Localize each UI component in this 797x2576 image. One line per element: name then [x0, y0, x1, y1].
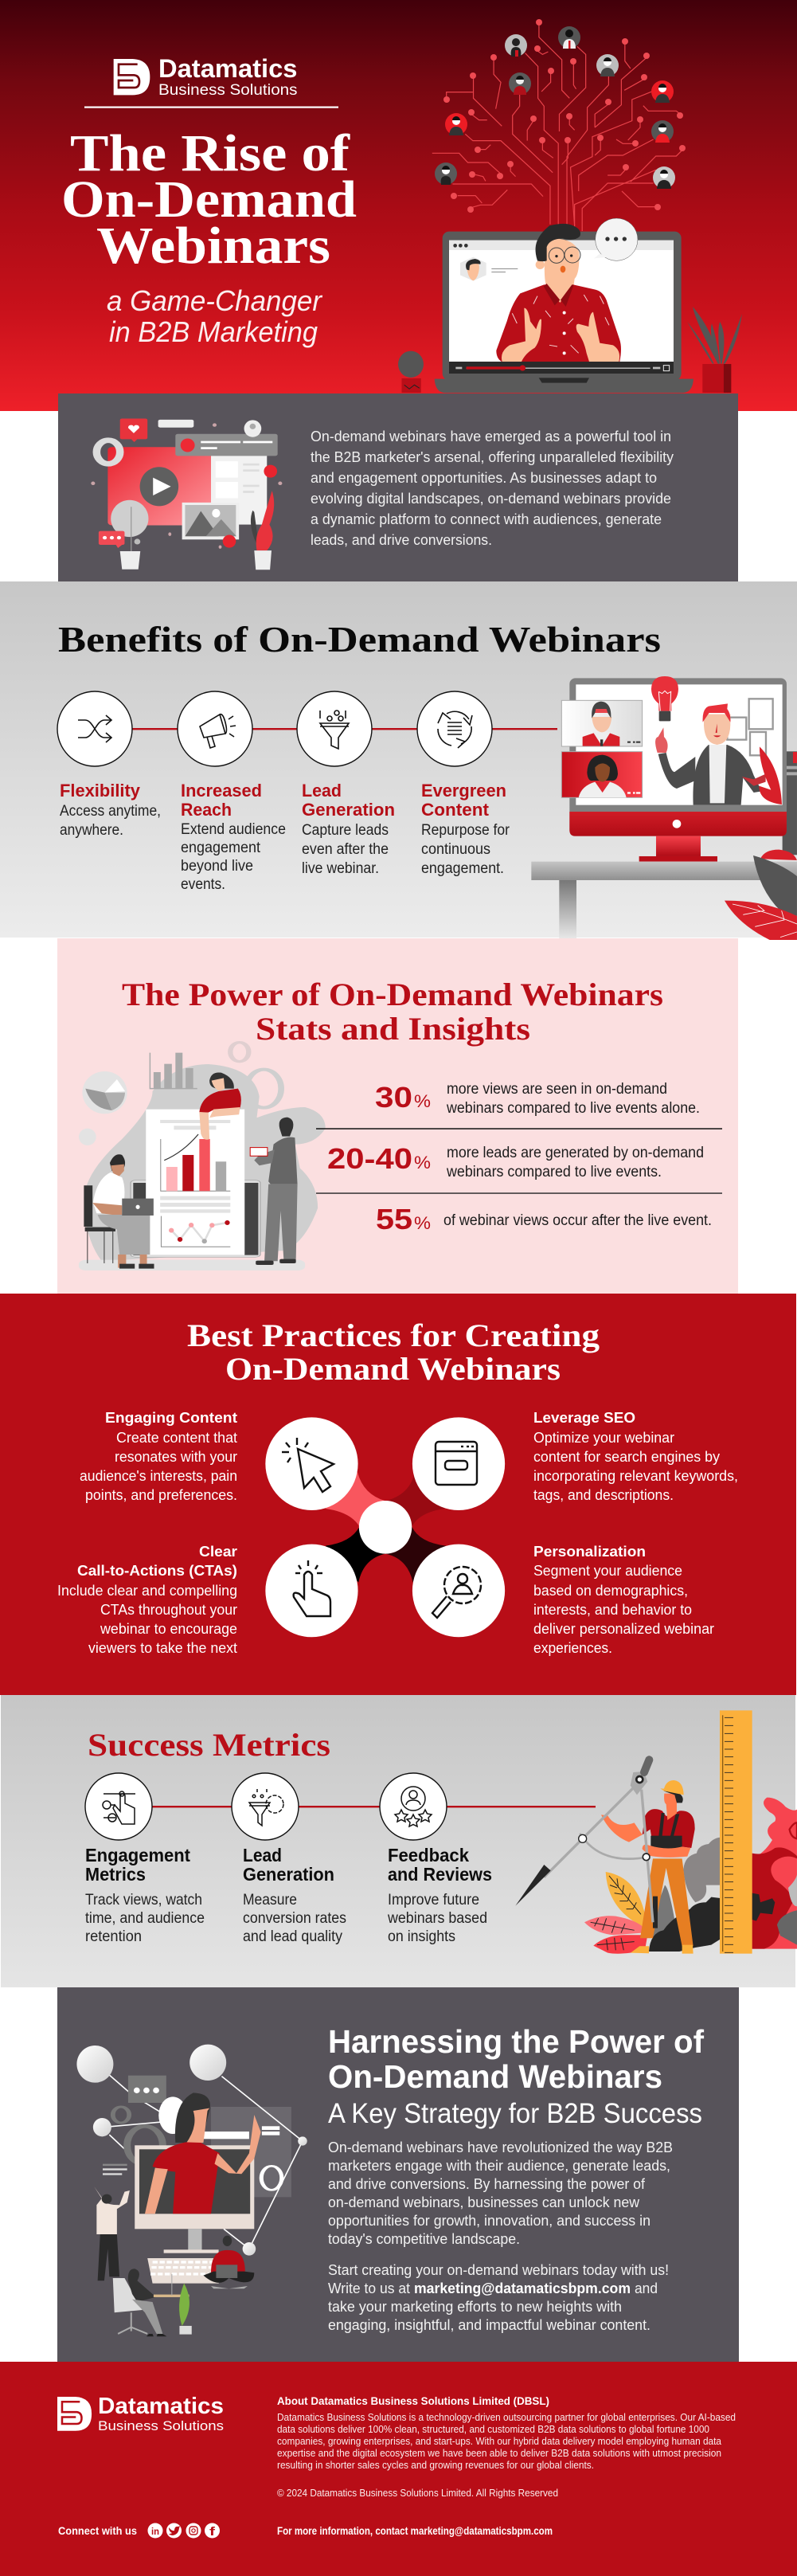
text: harnessing body: take your marketing efforts to new heights with	[328, 2298, 622, 2315]
intro text: On-demand webinars have emerged as a powerful tool in	[311, 429, 671, 444]
illustration: monitor with video call on desk	[531, 676, 797, 940]
stat: 55 percent: 55	[376, 1203, 412, 1235]
text: clear CTAs	[57, 1544, 237, 1656]
illustration: worker with compass and ruler	[515, 1710, 797, 1954]
metric: feedback and reviews: Feedback	[388, 1845, 469, 1865]
text: leverage SEO: Optimize your webinar	[533, 1430, 674, 1446]
text: engaging content: Engaging Content	[105, 1410, 237, 1426]
text: about DBSL: Datamatics Business Solutions is a technology-driven outsourcing partner for global enterprises. Our AI-based	[277, 2412, 736, 2423]
panel: harnessing the power	[57, 1987, 739, 2362]
text: harnessing body: marketers engage with their audience, generate leads,	[328, 2157, 670, 2174]
metric: lead generation: Lead	[243, 1845, 282, 1865]
text: harnessing body: and	[635, 2280, 658, 2296]
text: clear CTAs: Include clear and compelling	[57, 1583, 237, 1599]
heading: harnessing: On-Demand Webinars	[328, 2058, 662, 2095]
benefit: evergreen content: engagement.	[421, 860, 504, 877]
metric: engagement metrics: Engagement	[85, 1845, 190, 1865]
stat: 30 percent: webinars compared to live events alone.	[446, 1100, 700, 1117]
intro text: the B2B marketer's arsenal, offering unparalleled flexibility	[311, 449, 674, 465]
icon: pointing finger tap	[294, 1560, 330, 1616]
benefit: increased reach: Increased	[181, 781, 262, 801]
text: engaging content	[80, 1410, 237, 1503]
text: personalization	[533, 1544, 714, 1656]
metric: engagement metrics: retention	[85, 1928, 142, 1945]
heading: harnessing: A Key Strategy for B2B Success	[328, 2098, 702, 2129]
text: harnessing body: marketing@datamaticsbpm.com	[414, 2280, 631, 2296]
text: about DBSL: About Datamatics Business Solutions Limited (DBSL)	[277, 2395, 549, 2407]
intro text	[311, 429, 674, 548]
icon: cursor click	[282, 1438, 334, 1492]
text: leverage SEO: incorporating relevant keywords,	[533, 1468, 738, 1484]
benefit: lead generation	[297, 691, 395, 877]
metric: engagement metrics	[85, 1773, 205, 1945]
text: harnessing body: engaging, insightful, and impactful webinar content.	[328, 2316, 650, 2333]
metric: engagement metrics: time, and audience	[85, 1910, 205, 1927]
stat: 20-40 percent: webinars compared to live events.	[446, 1164, 662, 1180]
title: Webinars	[96, 217, 330, 275]
text: harnessing body: Start creating your on-demand webinars today with us!	[328, 2261, 669, 2278]
text: clear CTAs: webinar to encourage	[100, 1621, 237, 1637]
heading: best practices: Best Practices for Creating	[187, 1317, 600, 1353]
panel: footer	[0, 2362, 797, 2576]
logo: Datamatics footer: Datamatics	[98, 2394, 224, 2419]
benefit: flexibility: Flexibility	[60, 781, 141, 801]
stat: 20-40 percent: 20-40	[327, 1142, 412, 1175]
heading: benefits: Benefits of On-Demand Webinars	[58, 619, 661, 660]
stat: 30 percent: 30	[375, 1081, 412, 1114]
text: leverage SEO: tags, and descriptions.	[533, 1487, 674, 1503]
benefit: evergreen content: Evergreen	[421, 781, 506, 801]
text: about DBSL	[277, 2395, 736, 2499]
metric: engagement metrics: Track views, watch	[85, 1892, 202, 1909]
stat: 20-40 percent: %	[414, 1153, 431, 1173]
logo: Datamatics footer	[57, 2394, 224, 2433]
stat: 20-40 percent	[327, 1142, 704, 1180]
benefit: evergreen content	[417, 691, 510, 877]
benefit: lead generation: even after the	[302, 841, 389, 858]
text: contact line: For more information, contact marketing@datamaticsbpm.com	[277, 2524, 553, 2537]
text: leverage SEO	[533, 1410, 738, 1503]
metric: lead generation: conversion rates	[243, 1910, 346, 1927]
intro text: leads, and drive conversions.	[311, 532, 492, 548]
text: engaging content: Create content that	[116, 1430, 237, 1446]
text: harnessing body: opportunities for growth, innovation, and success in	[328, 2212, 650, 2229]
text: personalization: deliver personalized webinar	[533, 1621, 714, 1637]
title: The Rise of	[70, 124, 350, 182]
subtitle	[107, 284, 323, 348]
benefit: increased reach	[178, 691, 286, 893]
text: personalization: Segment your audience	[533, 1563, 682, 1579]
text: about DBSL: resulting in shorter sales cycles and growing revenues for our global clients.	[277, 2460, 594, 2471]
benefit: increased reach: Extend audience	[181, 821, 286, 838]
text: harnessing body: Write to us at	[328, 2280, 410, 2296]
illustration: cactus	[398, 351, 424, 393]
illustration: webinar host in monitor	[76, 2045, 307, 2336]
heading: best practices	[187, 1317, 600, 1387]
metric: feedback and reviews: and Reviews	[388, 1864, 492, 1885]
benefit: lead generation: Lead	[302, 781, 342, 801]
metric: lead generation: and lead quality	[243, 1928, 342, 1945]
stat: 30 percent: %	[414, 1091, 431, 1111]
panel: success metrics	[1, 1695, 797, 1987]
panel: benefits	[0, 581, 797, 940]
metric: feedback and reviews: on insights	[388, 1928, 455, 1945]
benefit: flexibility	[57, 691, 161, 839]
text: harnessing body: and drive conversions. By harnessing the power of	[328, 2175, 646, 2192]
heading: best practices: On-Demand Webinars	[225, 1351, 561, 1387]
metric: lead generation	[232, 1773, 346, 1945]
subtitle: a Game-Changer	[107, 284, 323, 317]
intro text: a dynamic platform to connect with audiences, generate	[311, 511, 662, 527]
title: On-Demand	[61, 170, 357, 229]
text: leverage SEO: content for search engines by	[533, 1449, 720, 1465]
text: harnessing body	[328, 2139, 673, 2333]
text: about DBSL: expertise and the digital ecosystem we have been able to deliver B2B data solutions with utmost precision	[277, 2448, 721, 2459]
social links	[58, 2523, 220, 2539]
panel: stats and insights	[57, 938, 738, 1294]
stat: 55 percent	[376, 1203, 712, 1235]
benefit: lead generation: Capture leads	[302, 822, 389, 839]
benefit: increased reach: events.	[181, 876, 225, 893]
illustration: desk plant	[687, 307, 742, 393]
panel: introduction	[58, 393, 738, 581]
text: about DBSL: © 2024 Datamatics Business Solutions Limited. All Rights Reserved	[277, 2488, 558, 2499]
metric: lead generation: Generation	[243, 1864, 334, 1885]
logo: Datamatics	[84, 54, 338, 108]
people avatars	[435, 26, 675, 189]
text: about DBSL: companies, growing enterprises, and start-ups. With our hybrid data delivery model employing human data	[277, 2436, 721, 2447]
panel: hero header	[0, 0, 797, 411]
social links: Connect with us	[58, 2524, 137, 2537]
social links: f	[209, 2525, 216, 2539]
intro text: evolving digital landscapes, on-demand webinars provide	[311, 491, 671, 507]
benefit: lead generation: Generation	[302, 800, 395, 820]
text: clear CTAs: Clear	[199, 1544, 237, 1560]
logo: Datamatics: Datamatics	[158, 54, 298, 83]
benefit: flexibility: Access anytime,	[60, 803, 161, 820]
text: personalization: interests, and behavior to	[533, 1602, 692, 1618]
benefit: evergreen content: Content	[421, 800, 490, 820]
text: engaging content: audience's interests, pain	[80, 1468, 237, 1484]
text: harnessing body: today's competitive landscape.	[328, 2230, 520, 2247]
benefit: increased reach: engagement	[181, 840, 261, 856]
stat: 20-40 percent: more leads are generated by on-demand	[447, 1145, 704, 1161]
metric: engagement metrics: Metrics	[85, 1864, 146, 1885]
text: about DBSL: data solutions deliver 100% clean, structured, and customized B2B data solutions to global fortune 1000	[277, 2424, 709, 2435]
metric: feedback and reviews: webinars based	[387, 1910, 487, 1927]
logo: Datamatics: Business Solutions	[158, 82, 298, 99]
heading: stats: Stats and Insights	[256, 1011, 530, 1047]
text: personalization: experiences.	[533, 1640, 612, 1656]
benefit: increased reach: Reach	[181, 800, 232, 820]
metric: feedback and reviews: Improve future	[388, 1892, 479, 1909]
text: engaging content: points, and preferences.	[85, 1487, 237, 1503]
heading: success metrics: Success Metrics	[88, 1727, 330, 1763]
benefit: increased reach: beyond live	[181, 858, 253, 875]
illustration: video player collage	[91, 419, 282, 570]
metric: lead generation: Measure	[243, 1892, 297, 1909]
diagram: four practice circles with hub	[265, 1417, 505, 1637]
title	[61, 124, 357, 275]
illustration: laptop with presenter	[435, 218, 693, 393]
stat: 55 percent: of webinar views occur after the live event.	[443, 1212, 712, 1229]
benefit: flexibility: anywhere.	[60, 822, 123, 839]
text: clear CTAs: viewers to take the next	[88, 1640, 237, 1656]
benefit: evergreen content: continuous	[421, 841, 490, 858]
social links: in	[151, 2526, 159, 2537]
benefit: lead generation: live webinar.	[302, 860, 379, 877]
icon: browser window	[436, 1442, 477, 1485]
text: harnessing body: on-demand webinars, businesses can unlock new	[328, 2194, 640, 2210]
heading: stats: The Power of On-Demand Webinars	[122, 977, 663, 1012]
illustration: circuit tree of people	[432, 19, 686, 231]
text: clear CTAs: CTAs throughout your	[100, 1602, 237, 1618]
stat: 30 percent: more views are seen in on-demand	[447, 1081, 667, 1098]
text: personalization: based on demographics,	[533, 1583, 688, 1599]
text: clear CTAs: Call-to-Actions (CTAs)	[77, 1563, 237, 1579]
heading: harnessing: Harnessing the Power of	[328, 2023, 704, 2060]
logo: Datamatics footer: Business Solutions	[98, 2418, 224, 2433]
text: leverage SEO: Leverage SEO	[533, 1410, 635, 1426]
benefit: evergreen content: Repurpose for	[421, 822, 510, 839]
panel: best practices	[0, 1294, 796, 1695]
stat: 55 percent: %	[414, 1213, 431, 1233]
subtitle: in B2B Marketing	[109, 315, 318, 348]
text: harnessing body: On-demand webinars have revolutionized the way B2B	[328, 2139, 673, 2155]
heading: harnessing	[328, 2023, 704, 2129]
intro text: and engagement opportunities. As businesses adapt to	[311, 470, 657, 486]
metric: feedback and reviews	[380, 1773, 492, 1945]
heading: stats	[122, 977, 663, 1047]
text: personalization: Personalization	[533, 1544, 646, 1560]
illustration: analytics team	[79, 1043, 326, 1270]
text: engaging content: resonates with your	[115, 1449, 237, 1465]
stat: 30 percent	[375, 1081, 700, 1117]
icon: magnifier with person in gear	[432, 1567, 481, 1618]
